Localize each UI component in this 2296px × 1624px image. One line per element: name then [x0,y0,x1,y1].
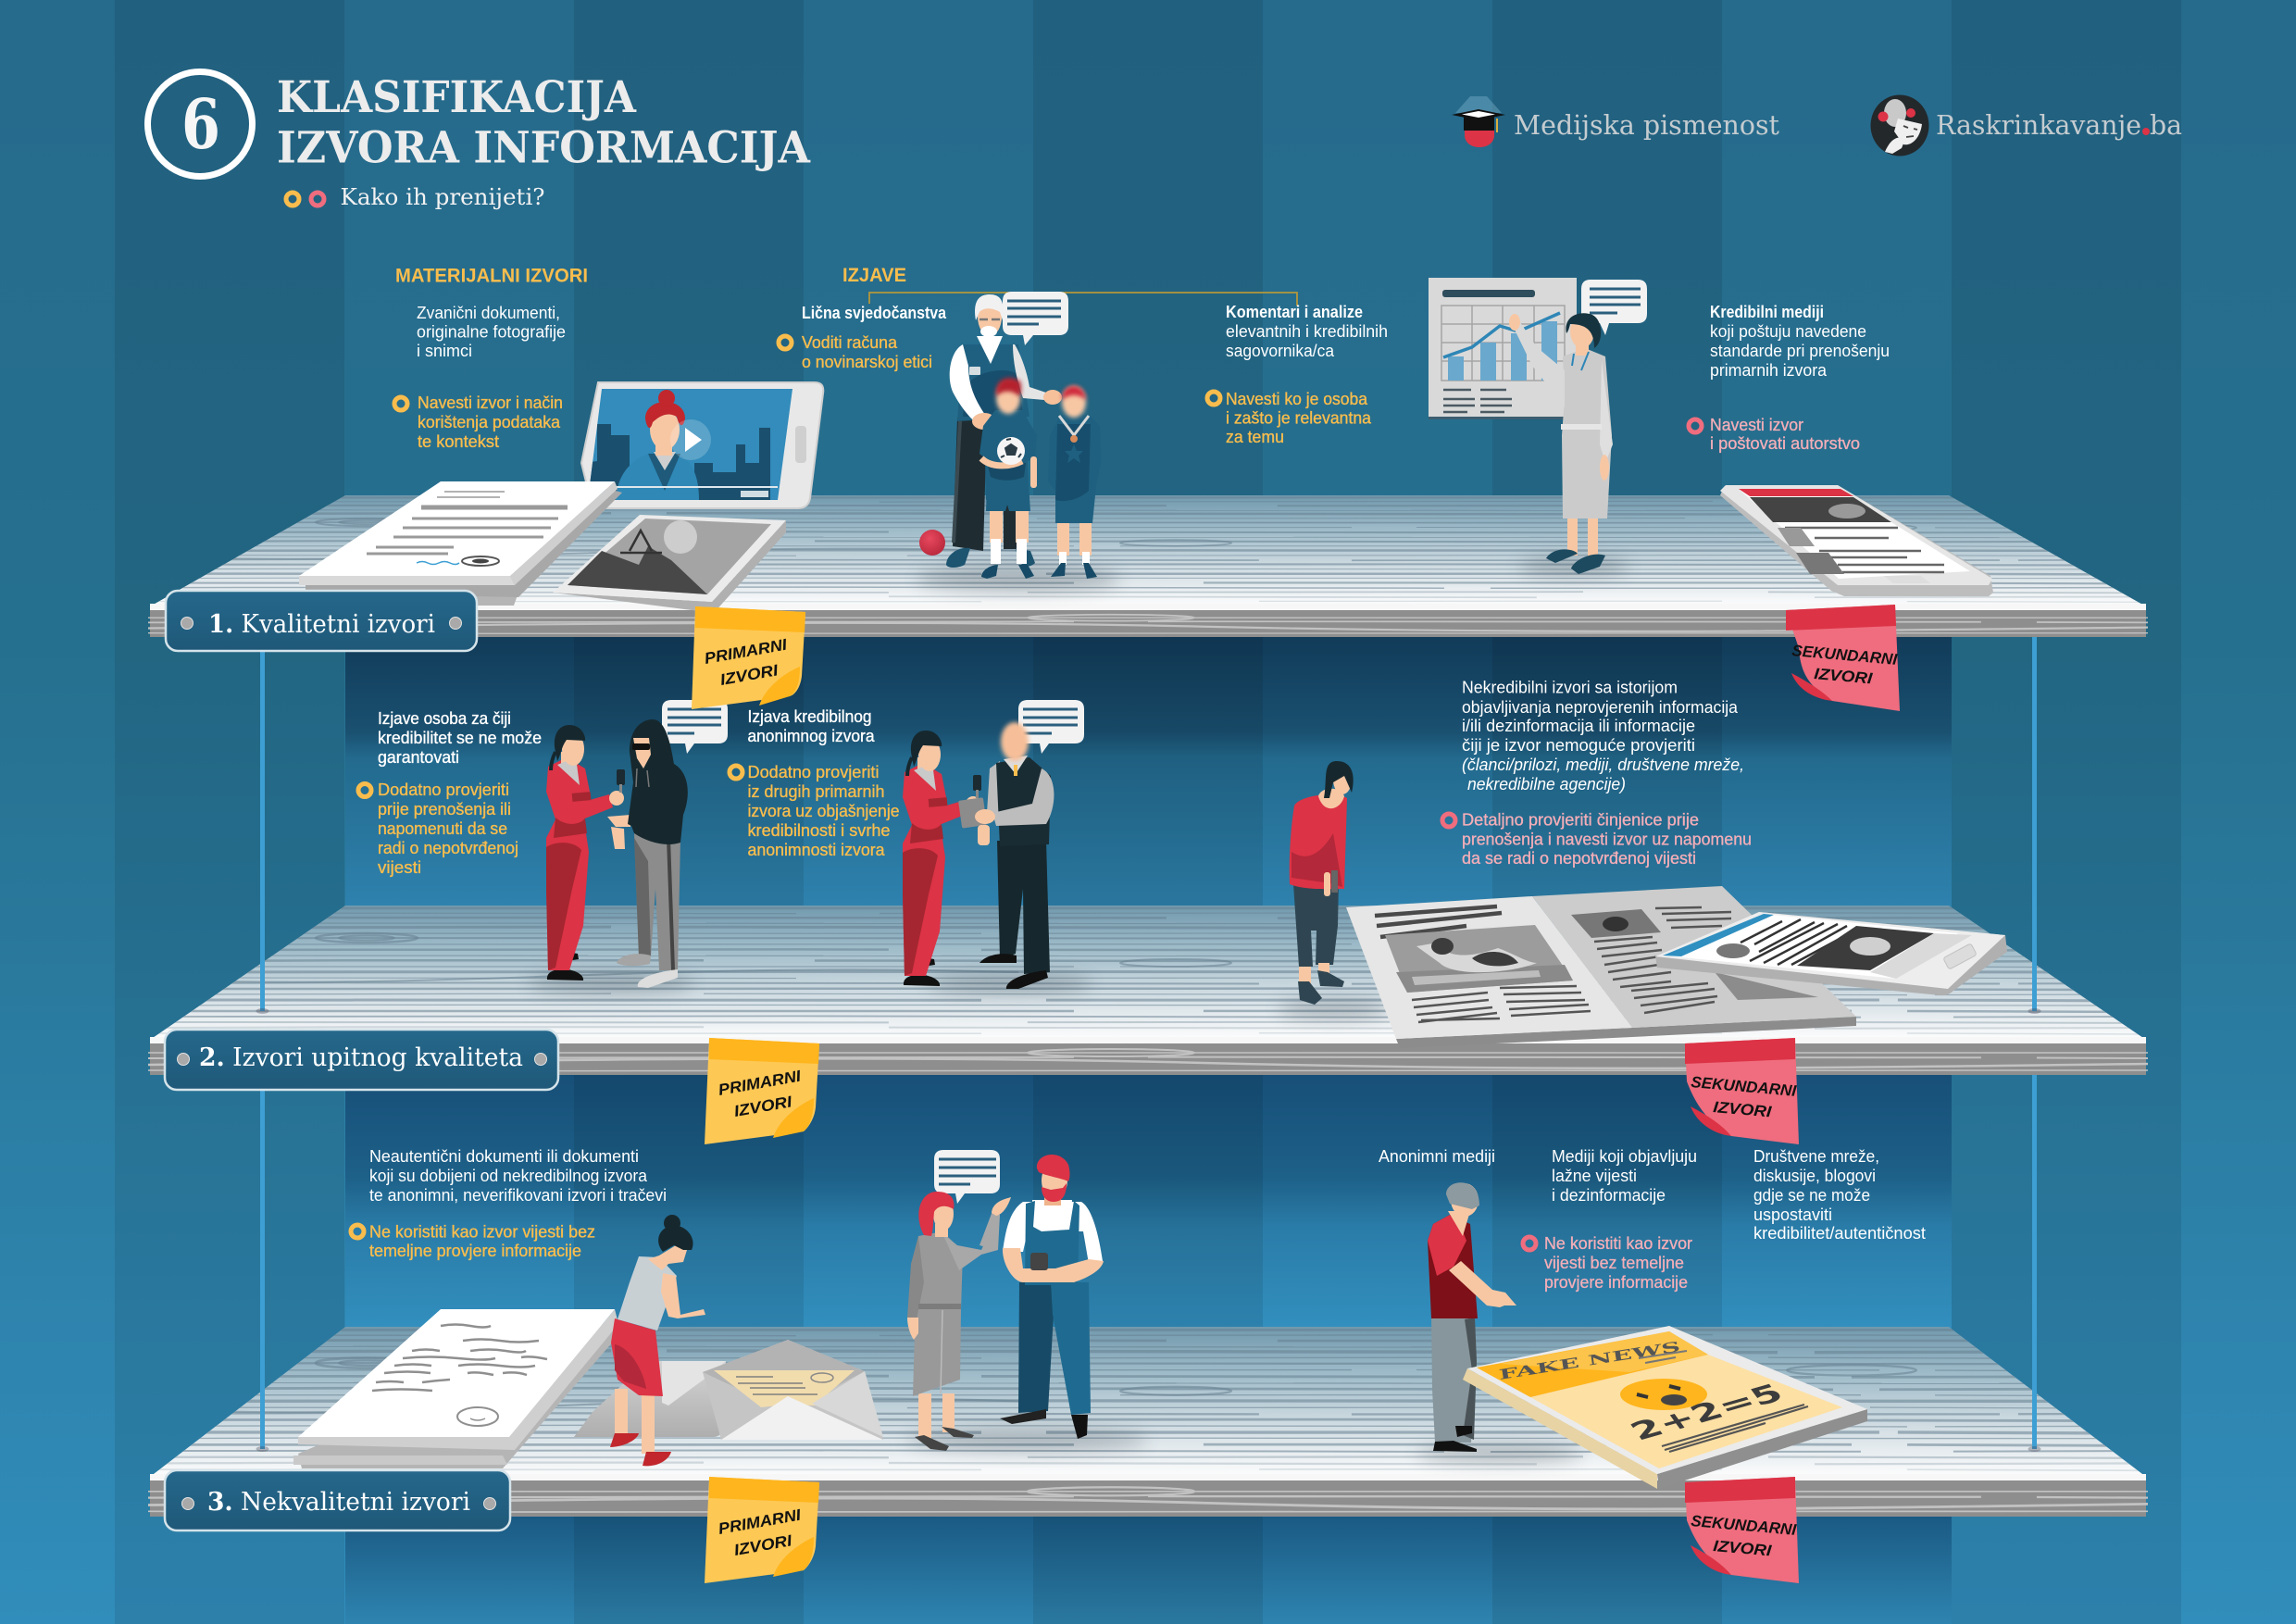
callout: detaljno provjeriti: Detaljno provjeriti činjenice prije [1462,811,1699,830]
text: kredibilni mediji: primarnih izvora [1710,361,1828,380]
text: komentari i analize: Komentari i analize [1226,303,1363,321]
illustration: fake news magazine [1463,1326,1867,1489]
heading: materijalni izvori: MATERIJALNI IZVORI [395,265,588,287]
main heading: IZVORA INFORMACIJA [277,122,811,174]
bubble: woman in grey [934,1150,1000,1204]
icon: red ball [919,530,945,556]
sticky note: sekundarni izvori, shelf 2 [1685,1038,1799,1144]
callout: dodatno provjeriti 1 [358,781,518,877]
callout: detaljno provjeriti: da se radi o nepotvrđenoj vijesti [1462,849,1696,868]
subtitle with markers: Kako ih prenijeti? [341,184,544,210]
text: izjave osoba: Izjave osoba za čiji [378,709,511,728]
bubble: hooded source [662,700,728,754]
sticky note: sekundarni izvori, shelf 2: IZVORI [1713,1098,1773,1121]
callout: voditi racuna [779,333,932,371]
sticky note: primarni izvori, shelf 2 [705,1038,819,1144]
callout: navesti ko je osoba: i zašto je relevantna [1226,409,1372,428]
illustration: fake news magazine: FAKE NEWS [1498,1339,1681,1383]
sticky note: primarni izvori, shelf 1: PRIMARNI [703,635,790,668]
main heading: KLASIFIKACIJA [277,72,636,123]
illustration: anonymous papers [293,1309,620,1468]
callout: navesti izvor i nacin [394,394,563,451]
text: komentari i analize: sagovornika/ca [1226,342,1335,360]
sticky note: sekundarni izvori, shelf 3: SEKUNDARNI [1691,1512,1798,1539]
boy with ball [980,378,1037,579]
callout: voditi racuna: o novinarskoj etici [802,353,932,371]
heading: izjave: IZJAVE [842,265,906,286]
figure: worker in overalls [1000,1155,1104,1439]
callout: navesti ko je osoba: Navesti ko je osoba [1226,390,1368,408]
callout: dodatno provjeriti 1: vijesti [378,858,421,877]
sticky note: primarni izvori, shelf 3: PRIMARNI [717,1505,804,1538]
girl with medal [1048,386,1101,579]
text: kredibilni mediji: koji poštuju navedene [1710,322,1866,341]
figure: grandfather and children [946,292,1101,579]
sticky note: sekundarni izvori, shelf 1: SEKUNDARNI [1791,642,1899,668]
shelf 1 [148,495,2148,637]
sticky note: primarni izvori, shelf 1: IZVORI [718,661,780,689]
illustration: presentation board [1429,278,1577,419]
sticky note: primarni izvori, shelf 3: IZVORI [732,1531,794,1559]
floor shadows [528,557,1629,1463]
text: nekredibilni izvori: i/ili dezinformacija ili informacije [1462,717,1695,735]
text: neautenticni dokumenti: koji su dobijeni od nekredibilnog izvora [369,1167,648,1185]
figure: man in cap pointing [1428,1182,1516,1452]
sticky note: sekundarni izvori, shelf 3: IZVORI [1713,1537,1773,1560]
label: 3. Nekvalitetni izvori: 3. Nekvalitetni izvori [207,1488,470,1517]
sticky note: primarni izvori, shelf 3 [705,1477,819,1583]
icon: shocked emoji [1620,1379,1707,1410]
text: drustvene mreze [1753,1147,1926,1243]
callout: dodatno provjeriti 2: Dodatno provjeriti [748,763,880,781]
callout: dodatno provjeriti 2: kredibilnosti i svrhe [748,821,891,840]
callout: dodatno provjeriti 1: prije prenošenja ili [378,800,511,818]
text: nekredibilni izvori: čiji je izvor nemoguće provjeriti [1462,736,1695,755]
text: mediji koji objavljuju: i dezinformacije [1552,1186,1666,1205]
text: neautenticni dokumenti: Neautentični dokumenti ili dokumenti [369,1147,639,1166]
bubble [1003,292,1068,345]
number badge [148,72,252,176]
text: drustvene mreze: gdje se ne može [1753,1186,1870,1205]
logo: Raskrinkavanje.ba: Raskrinkavanje.ba [1936,109,2182,141]
text: izjave osoba [378,709,542,767]
number badge: 6 [181,85,220,165]
figure: reporter 2 [903,731,981,986]
sticky note: sekundarni izvori, shelf 1 [1786,605,1900,711]
text: nekredibilni izvori: Nekredibilni izvori sa istorijom [1462,678,1678,696]
callout: navesti izvor i nacin: te kontekst [418,432,499,451]
callout: navesti izvor i nacin: korištenja podataka [418,413,561,431]
sticky note: sekundarni izvori, shelf 3 [1685,1477,1799,1583]
text: izjava anonimnog izvora: Izjava kredibilnog [748,707,872,726]
callout: dodatno provjeriti 1: Dodatno provjeriti [378,781,509,799]
logo: Medijska pismenost [1452,96,1779,147]
text: izjava anonimnog izvora [748,707,875,745]
old man [946,294,1062,568]
izjave bracket [869,293,1297,306]
callout: ne koristiti 2: vijesti bez temeljne [1544,1254,1684,1272]
figure: reporter 1 [546,725,625,981]
text: drustvene mreze: Društvene mreže, [1753,1147,1879,1166]
text: materijalni izvori: originalne fotografije [417,322,566,341]
figure: presenter woman [1509,313,1613,574]
text: mediji koji objavljuju: lažne vijesti [1552,1167,1637,1185]
illustration: tablet with article [1655,912,2007,995]
figure: woman in grey dress [907,1192,1011,1451]
sticky note: sekundarni izvori, shelf 1: IZVORI [1814,665,1874,688]
text: nekredibilni izvori: objavljivanja neprovjerenih informacija [1462,698,1739,717]
shelf 2 [148,906,2148,1075]
illustration: official documents [299,481,622,606]
callout: voditi racuna: Voditi računa [802,333,898,352]
text: neautenticni dokumenti [369,1147,667,1205]
callout: navesti izvor i autorstvo: i poštovati autorstvo [1710,434,1860,453]
figure: woman reading phone [1290,761,1354,1005]
callout: navesti ko je osoba [1207,390,1372,446]
illustration: smartphone with credible media [1720,485,1993,596]
callout: navesti izvor i autorstvo [1689,416,1860,453]
text: drustvene mreze: diskusije, blogovi [1753,1167,1876,1185]
figure: woman pointing [610,1215,705,1466]
text: izjave osoba: garantovati [378,748,459,767]
sticky note: primarni izvori, shelf 2: IZVORI [732,1093,794,1120]
text: komentari i analize [1226,303,1388,360]
sticky note: primarni izvori, shelf 1 [692,606,805,709]
bubble: anonymous man [1018,700,1084,754]
text: anonimni mediji: Anonimni mediji [1379,1147,1495,1166]
callout: ne koristiti 1: temeljne provjere informacije [369,1242,581,1260]
label: 2. Izvori upitnog kvaliteta [165,1030,558,1090]
text: neautenticni dokumenti: te anonimni, neverifikovani izvori i tračevi [369,1186,667,1205]
text: komentari i analize: elevantnih i kredibilnih [1226,322,1388,341]
callout: dodatno provjeriti 2 [730,763,900,859]
text: kredibilni mediji [1710,303,1890,380]
text: nekredibilni izvori [1462,678,1744,793]
text: materijalni izvori: Zvanični dokumenti, [417,304,560,322]
shelf 3 [148,1327,2148,1517]
hanging rods [256,637,2040,1452]
illustration: fake news magazine: 2+2=5 [1624,1379,1790,1446]
figure: hooded source [607,719,688,988]
title block [148,72,811,210]
callout: dodatno provjeriti 1: radi o nepotvrđenoj [378,839,518,857]
text: materijalni izvori [417,304,566,360]
text: drustvene mreze: uspostaviti [1753,1206,1832,1224]
text: kredibilni mediji: standarde pri prenošenju [1710,342,1890,360]
text: materijalni izvori: i snimci [417,342,472,360]
text: licna svjedocanstva: Lična svjedočanstva [802,304,947,322]
text: nekredibilni izvori: nekredibilne agencije) [1467,775,1626,793]
callout: ne koristiti 2: provjere informacije [1544,1273,1688,1292]
label: 3. Nekvalitetni izvori [165,1470,510,1530]
text: drustvene mreze: kredibilitet/autentičnost [1753,1224,1926,1243]
illustration: tablet with video [581,382,823,508]
text: izjave osoba: kredibilitet se ne može [378,729,542,747]
label: 1. Kvalitetni izvori [166,591,477,651]
illustration: open newspaper [1346,886,1856,1048]
text: nekredibilni izvori: (članci/prilozi, mediji, društvene mreže, [1462,756,1744,774]
callout: detaljno provjeriti: prenošenja i navesti izvor uz napomenu [1462,830,1752,848]
callout: dodatno provjeriti 1: napomenuti da se [378,819,507,838]
main heading [277,72,811,174]
text: mediji koji objavljuju: Mediji koji objavljuju [1552,1147,1697,1166]
callout: dodatno provjeriti 2: izvora uz objašnjenje [748,802,900,820]
text: izjava anonimnog izvora: anonimnog izvora [748,727,875,745]
illustration: open envelope [703,1340,883,1440]
sticky note: primarni izvori, shelf 2: PRIMARNI [717,1067,804,1099]
callout: navesti ko je osoba: za temu [1226,428,1284,446]
text: mediji koji objavljuju [1552,1147,1697,1205]
text: kredibilni mediji: Kredibilni mediji [1710,303,1824,321]
callout: ne koristiti 1 [351,1222,595,1260]
logo: Raskrinkavanje.ba [1870,94,2182,156]
label: 1. Kvalitetni izvori: 1. Kvalitetni izvori [208,610,435,639]
callout: ne koristiti 1: Ne koristiti kao izvor vijesti bez [369,1222,595,1241]
callout: dodatno provjeriti 2: anonimnosti izvora [748,841,885,859]
sticky note: sekundarni izvori, shelf 2: SEKUNDARNI [1691,1073,1798,1100]
illustration: closed envelope [574,1361,726,1437]
callout: navesti izvor i autorstvo: Navesti izvor [1710,416,1803,434]
callout: ne koristiti 2 [1523,1234,1692,1292]
callout: ne koristiti 2: Ne koristiti kao izvor [1544,1234,1692,1253]
label: 2. Izvori upitnog kvaliteta: 2. Izvori upitnog kvaliteta [199,1043,523,1072]
figure: anonymous man with vest [958,722,1054,989]
illustration: photograph [553,515,786,613]
callout: dodatno provjeriti 2: iz drugih primarnih [748,782,885,801]
speech bubble [1581,280,1647,335]
callout: navesti izvor i nacin: Navesti izvor i način [418,394,563,412]
callout: detaljno provjeriti [1442,811,1752,868]
logo: Medijska pismenost: Medijska pismenost [1514,109,1779,141]
